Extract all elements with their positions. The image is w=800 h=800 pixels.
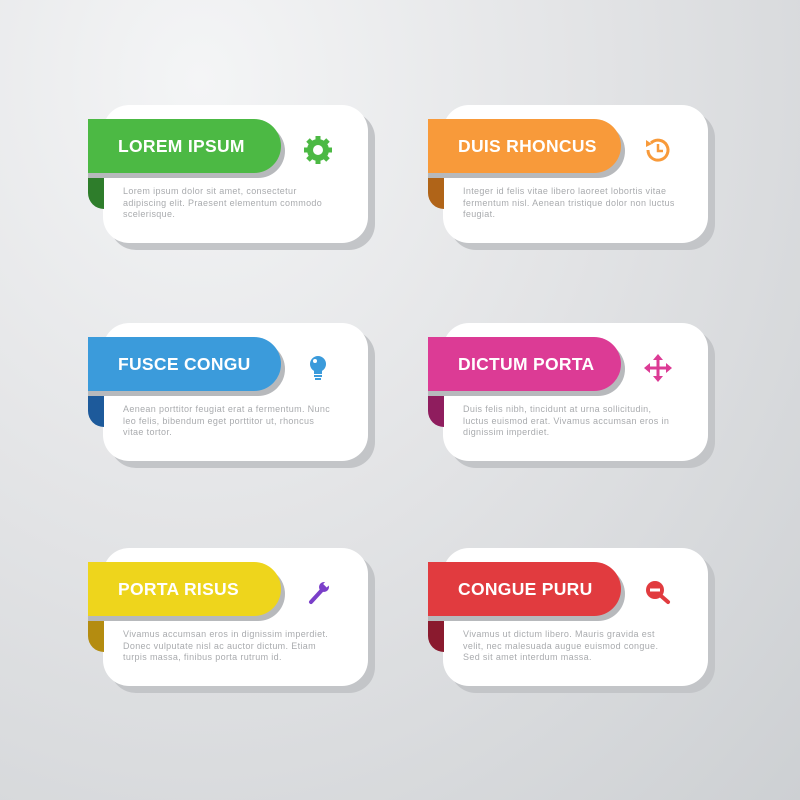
text block: Vivamus ut dictum libero. Mauris gravida est velit, nec malesuada augue euismod congue. Sed sit amet interdum massa. — [463, 629, 658, 662]
card: dictum porta — [428, 323, 715, 468]
icon: gear — [304, 136, 332, 164]
ribbon heading: fusce congu: FUSCE CONGU — [118, 354, 251, 374]
text block: Duis felis nibh, tincidunt at urna sollicitudin, luctus euismod erat. Vivamus accumsan eros in dignissim imperdiet. — [463, 404, 669, 437]
text block: Integer id felis vitae libero laoreet lobortis vitae fermentum nisl. Aenean tristique dolor non luctus feugiat. — [463, 186, 675, 219]
ribbon heading: lorem ipsum: LOREM IPSUM — [118, 136, 245, 156]
icon: wrench — [308, 582, 329, 604]
card: porta risus — [88, 548, 375, 693]
ribbon heading: congue puru — [428, 562, 621, 616]
ribbon heading: congue puru: CONGUE PURU — [458, 579, 593, 599]
ribbon heading: porta risus: PORTA RISUS — [118, 579, 239, 599]
icon: zoom out — [646, 581, 670, 604]
card: duis rhoncus — [428, 105, 715, 250]
text block: Vivamus accumsan eros in dignissim imperdiet. Donec vulputate nisl ac auctor dictum. Etiam turpis massa, finibus porta rutrum id. — [123, 629, 328, 662]
ribbon heading: duis rhoncus: DUIS RHONCUS — [458, 136, 597, 156]
card: fusce congu — [88, 323, 375, 468]
text block: Lorem ipsum dolor sit amet, consectetur adipiscing elit. Praesent elementum commodo scelerisque. — [123, 186, 322, 219]
ribbon heading: fusce congu — [88, 337, 281, 391]
ribbon heading: duis rhoncus — [428, 119, 621, 173]
ribbon heading: dictum porta: DICTUM PORTA — [458, 354, 594, 374]
icon: history clock — [646, 138, 670, 162]
ribbon heading: lorem ipsum — [88, 119, 281, 173]
text block: Aenean porttitor feugiat erat a fermentum. Nunc leo felis, bibendum eget porttitor ut, rhoncus vitae tortor. — [123, 404, 330, 437]
icon: move arrows — [644, 354, 672, 382]
icon: lightbulb — [310, 356, 326, 380]
card: lorem ipsum — [88, 105, 375, 250]
ribbon heading: porta risus — [88, 562, 281, 616]
ribbon heading: dictum porta — [428, 337, 621, 391]
card: congue puru — [428, 548, 715, 693]
